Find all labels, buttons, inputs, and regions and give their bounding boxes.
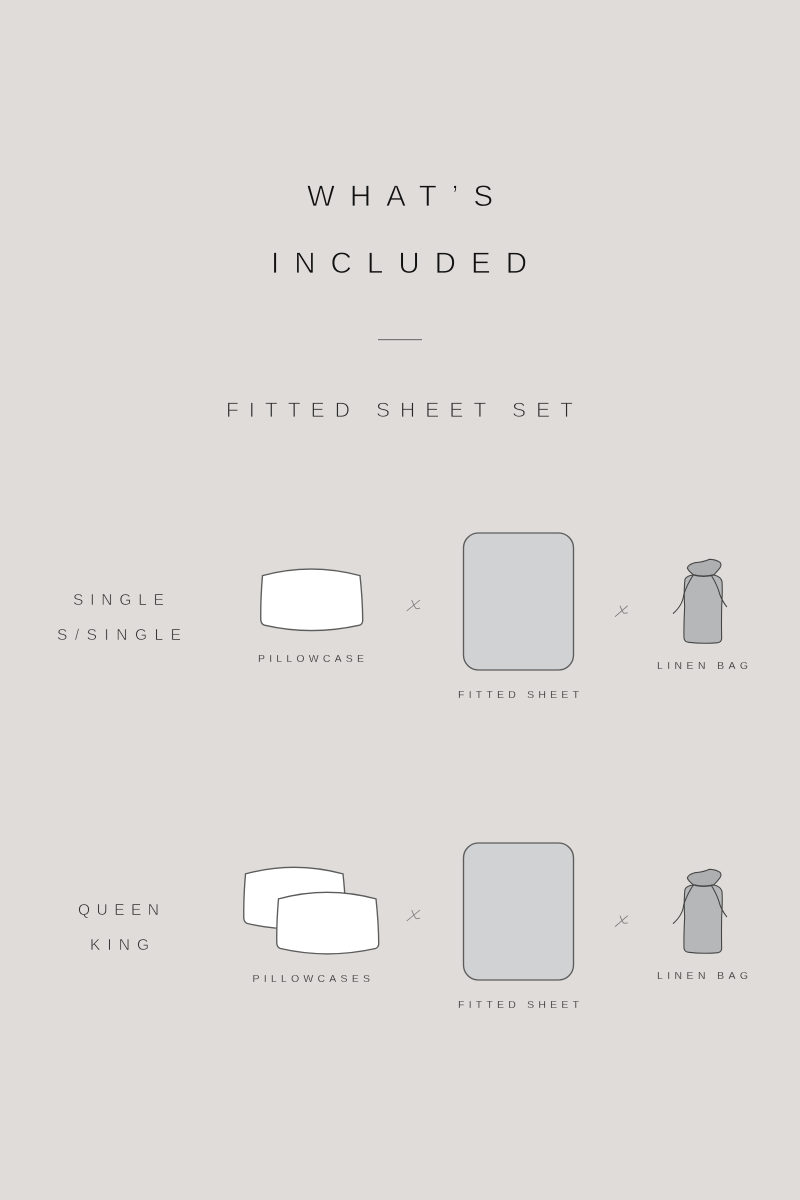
caption: linen bag: LINEN BAG [657, 970, 748, 982]
icon: fitted sheet [464, 843, 574, 980]
multiply mark [407, 910, 420, 921]
size labels: queen: KING [90, 937, 149, 954]
title: WHAT’S [307, 180, 493, 213]
multiply mark [615, 916, 628, 927]
caption: linen bag: LINEN BAG [657, 660, 748, 672]
caption: pillowcase: PILLOWCASE [258, 653, 364, 665]
icon: pillowcase [261, 569, 363, 631]
caption: pillowcases: PILLOWCASES [252, 973, 370, 985]
title: INCLUDED [271, 247, 527, 280]
subtitle: FITTED SHEET SET [226, 399, 573, 422]
icon: linen bag [673, 869, 727, 953]
size labels: single: SINGLE [73, 592, 164, 609]
caption: fitted sheet: FITTED SHEET [458, 689, 580, 701]
icon: linen bag [673, 559, 727, 643]
multiply mark [407, 600, 420, 611]
icon: two pillowcases [244, 867, 379, 954]
row: queen and king sizes [78, 843, 748, 1011]
multiply mark [615, 606, 628, 617]
row: single sizes [57, 533, 748, 701]
size labels: single: S/SINGLE [57, 627, 181, 644]
size labels: queen: QUEEN [78, 902, 159, 919]
title [271, 180, 527, 280]
icon: fitted sheet [464, 533, 574, 670]
size labels: queen [78, 902, 159, 954]
size labels: single [57, 592, 181, 644]
caption: fitted sheet: FITTED SHEET [458, 999, 580, 1011]
